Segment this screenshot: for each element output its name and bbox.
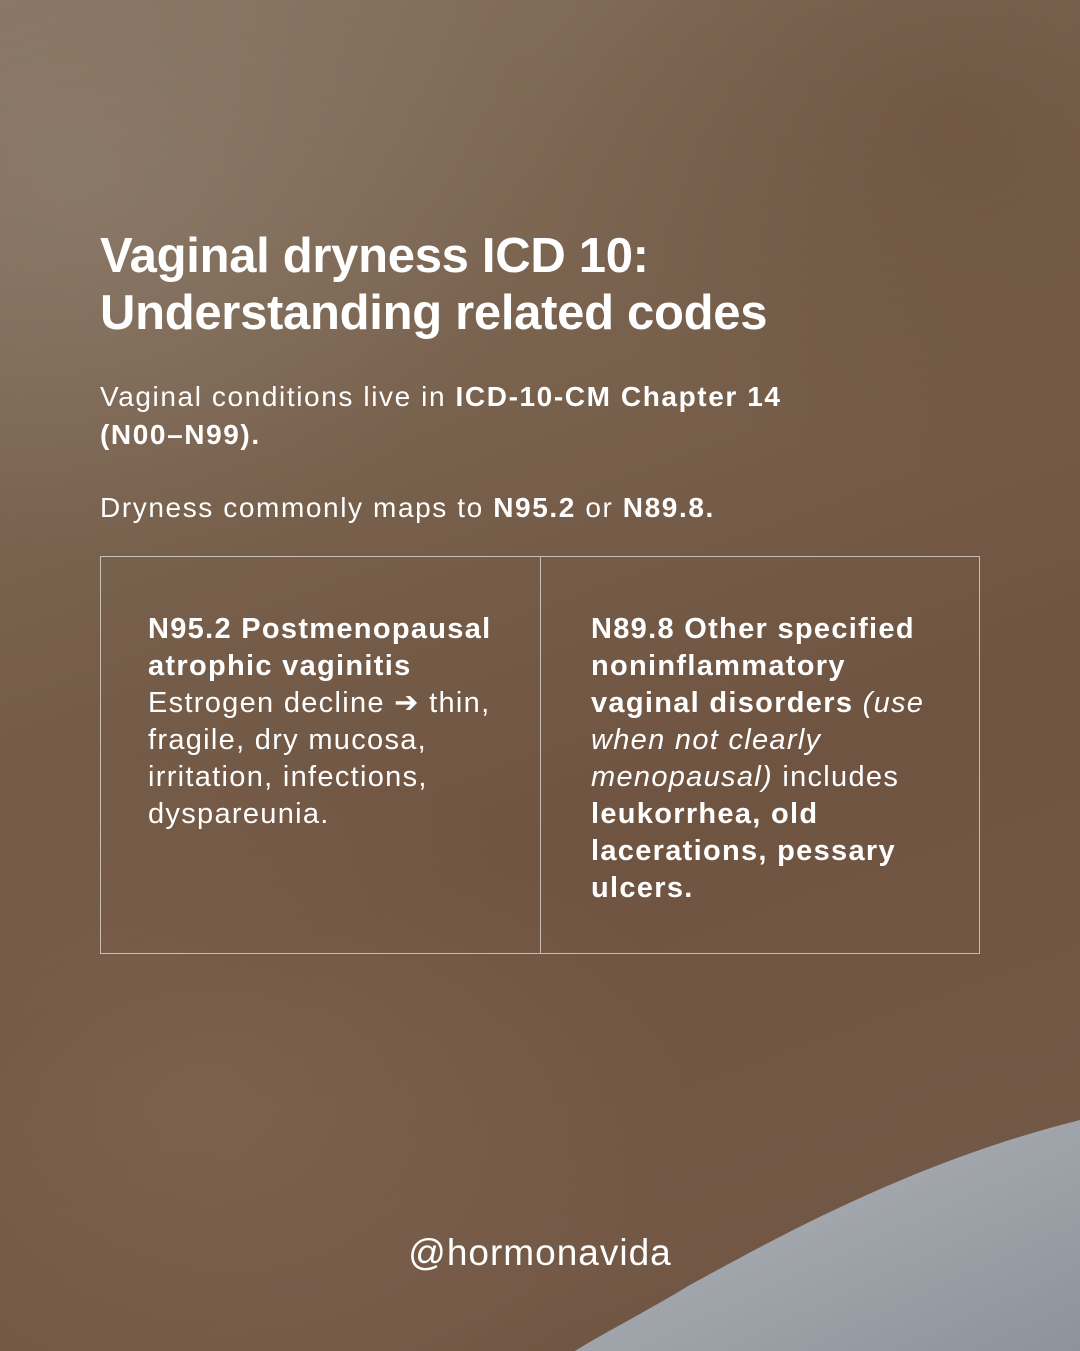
panel: N95.2: irritation, infections,: [148, 761, 428, 793]
title: Vaginal dryness ICD 10:: [100, 229, 649, 283]
intro text: Vaginal conditions live in ICD-10-CM Chapter 14: [100, 381, 782, 412]
panel: N89.8: [591, 613, 924, 904]
panel: code comparison box: [100, 556, 980, 954]
panel: N89.8: vaginal disorders (use: [591, 687, 924, 719]
panel: N89.8: leukorrhea, old: [591, 798, 818, 830]
title: [100, 229, 767, 340]
handle: @hormonavida: [408, 1232, 672, 1273]
panel: N89.8: noninflammatory: [591, 650, 846, 682]
dryness mapping text: Dryness commonly maps to N95.2 or N89.8.: [100, 492, 715, 523]
title: Understanding related codes: [100, 286, 767, 340]
panel: N89.8: ulcers.: [591, 872, 694, 904]
panel: N89.8: when not clearly: [591, 724, 821, 756]
intro text: (N00–N99).: [100, 419, 261, 450]
panel: N95.2: N95.2 Postmenopausal: [148, 613, 492, 645]
panel: N89.8: lacerations, pessary: [591, 835, 896, 867]
panel: N95.2: atrophic vaginitis: [148, 650, 412, 682]
panel: N95.2: dyspareunia.: [148, 798, 330, 830]
panel: N89.8: menopausal) includes: [591, 761, 899, 793]
intro text: [100, 381, 782, 450]
panel: N95.2: Estrogen decline ➔ thin,: [148, 687, 490, 719]
panel: N89.8: N89.8 Other specified: [591, 613, 915, 645]
panel: N95.2: fragile, dry mucosa,: [148, 724, 427, 756]
panel: N95.2: [148, 613, 492, 830]
